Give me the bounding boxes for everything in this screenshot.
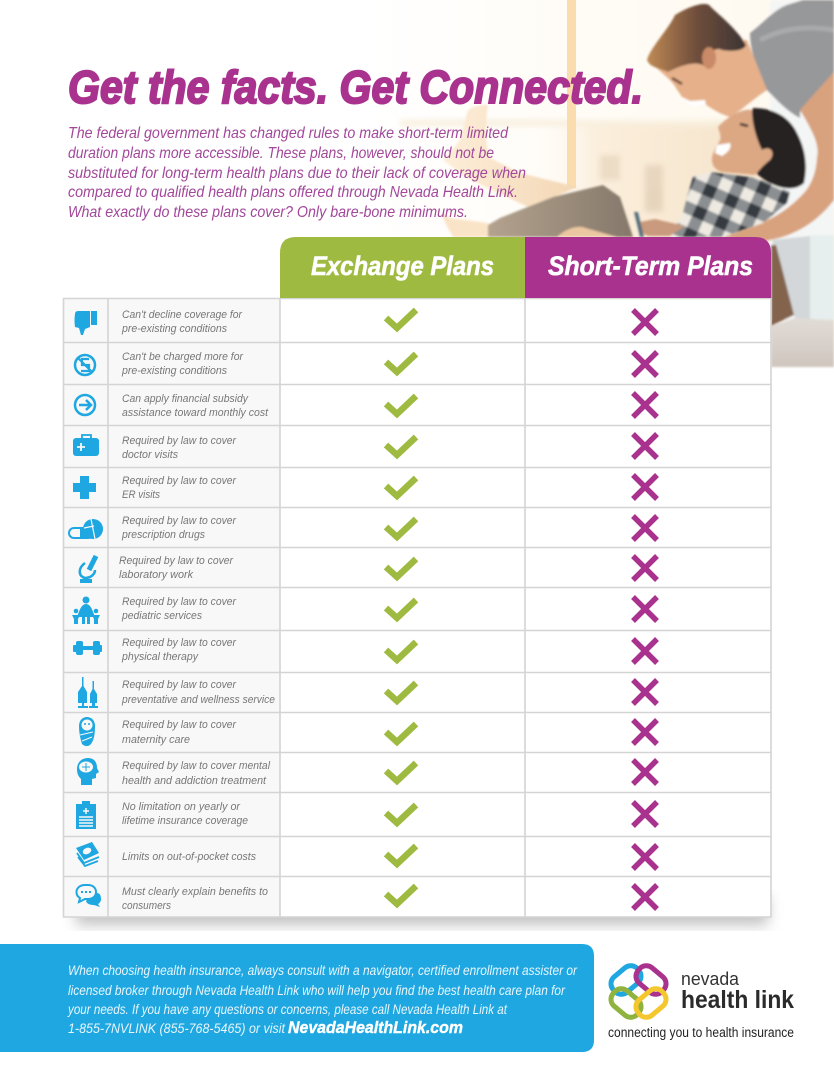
intro paragraph: substituted for long-term health plans due to their lack of coverage when — [68, 165, 526, 182]
row 3 — [75, 393, 657, 419]
row 5 text: ER visits — [122, 489, 160, 501]
header: Exchange Plans: Exchange Plans — [311, 251, 494, 281]
row 7 text: Required by law to cover — [119, 555, 234, 567]
cross — [633, 720, 657, 744]
row 3 text — [122, 393, 269, 419]
row 9 text — [121, 637, 237, 663]
man neck and face — [655, 40, 767, 117]
row 6 text: prescription drugs — [121, 529, 205, 541]
row 5 — [73, 475, 657, 501]
footer banner — [0, 944, 594, 1052]
row 13 text — [122, 801, 248, 827]
row 15 text — [122, 886, 268, 912]
check — [386, 683, 416, 701]
row 8 text: Required by law to cover — [122, 596, 237, 608]
check — [386, 519, 416, 537]
row 11 text — [122, 719, 237, 746]
table background — [64, 299, 771, 917]
logo: Nevada Health Link — [607, 962, 794, 1040]
check — [386, 846, 416, 864]
row 5 text — [122, 475, 237, 501]
check — [386, 354, 416, 372]
label columns — [64, 299, 280, 917]
header: Exchange Plans — [280, 237, 525, 298]
dark leg — [488, 185, 633, 237]
row 4 text: Required by law to cover — [122, 435, 237, 447]
icon: stack of money — [76, 842, 99, 866]
cross — [633, 680, 657, 704]
cross — [633, 597, 657, 621]
row 15 text: consumers — [122, 900, 171, 912]
table shadow — [76, 895, 768, 925]
cross — [633, 516, 657, 540]
row 6 — [69, 515, 657, 541]
photo: laughing couple — [370, 0, 834, 367]
wordmark bold: health link — [681, 986, 794, 1014]
icon: head with brain — [77, 758, 99, 785]
icon: arrow circle — [75, 395, 95, 415]
row 9 text: physical therapy — [121, 651, 199, 663]
table grid — [63, 298, 771, 918]
check — [386, 396, 416, 414]
row 10 text: Required by law to cover — [122, 679, 237, 691]
row 15 — [76, 885, 657, 912]
header: Short-Term Plans — [525, 237, 771, 298]
icon: thumbs down — [74, 311, 97, 335]
icon: microscope — [80, 556, 96, 583]
row 4 text: doctor visits — [122, 449, 178, 461]
row 12 text: health and addiction treatment — [122, 775, 267, 787]
check — [386, 886, 416, 904]
man hair — [647, 4, 746, 72]
row 12 text — [122, 760, 271, 787]
row 14 — [76, 842, 657, 869]
logo mark: linked rings — [607, 962, 670, 1021]
woman plaid shirt — [670, 172, 790, 237]
tagline: connecting you to health insurance — [608, 1025, 794, 1040]
cross — [633, 393, 657, 417]
check — [386, 437, 416, 455]
row 8 text: pediatric services — [121, 610, 202, 622]
intro paragraph: compared to qualified health plans offered through Nevada Health Link. — [68, 184, 518, 201]
icon: medical briefcase — [73, 435, 99, 456]
right window and floor — [770, 0, 834, 320]
row 12 — [77, 758, 657, 787]
row 1 text: Can't decline coverage for — [122, 309, 243, 321]
cross — [633, 845, 657, 869]
cross — [633, 310, 657, 334]
cross — [633, 885, 657, 909]
row 6 text: Required by law to cover — [122, 515, 237, 527]
row 6 text — [121, 515, 237, 541]
cross — [633, 475, 657, 499]
woman face — [712, 110, 772, 175]
intro paragraph: What exactly do these plans cover? Only bare-bone minimums. — [68, 204, 468, 221]
row 10 text — [121, 679, 275, 706]
wordmark: nevada — [681, 969, 740, 989]
row 1 text: pre-existing conditions — [121, 323, 227, 335]
cross — [633, 760, 657, 784]
check — [386, 559, 416, 577]
raised leg — [443, 105, 577, 208]
row 13 text: No limitation on yearly or — [122, 801, 241, 813]
man arm — [723, 72, 834, 241]
row 11 text: maternity care — [122, 734, 190, 746]
man shirt — [750, 0, 834, 118]
intro paragraph — [68, 125, 526, 221]
row 11 — [79, 717, 657, 746]
row 2 text: Can't be charged more for — [122, 351, 244, 363]
row 13 text: lifetime insurance coverage — [122, 815, 248, 827]
row 4 — [73, 434, 657, 461]
row 3 text: assistance toward monthly cost — [122, 407, 269, 419]
row 8 — [72, 596, 657, 624]
row 9 text: Required by law to cover — [122, 637, 237, 649]
cross — [633, 802, 657, 826]
row 13 — [76, 801, 657, 829]
title: Get the facts. Get Connected. — [68, 61, 643, 113]
icon: clipboard — [76, 801, 96, 829]
woman hair — [745, 108, 806, 188]
check — [386, 642, 416, 660]
cross — [633, 352, 657, 376]
row 8 text — [121, 596, 237, 622]
row 1 — [74, 309, 657, 335]
row 5 text: Required by law to cover — [122, 475, 237, 487]
check — [386, 724, 416, 742]
icon: medical cross — [73, 476, 96, 499]
check — [386, 600, 416, 618]
header: Short-Term Plans: Short-Term Plans — [548, 251, 753, 281]
row 11 text: Required by law to cover — [122, 719, 237, 731]
cross — [633, 434, 657, 458]
icon: dumbbell — [73, 641, 102, 655]
row 7 text: laboratory work — [119, 569, 193, 581]
check — [386, 805, 416, 823]
row 14 text: Limits on out-of-pocket costs — [122, 851, 256, 863]
footer text: 1-855-7NVLINK (855-768-5465) or visit — [68, 1020, 286, 1036]
cross — [633, 639, 657, 663]
row 15 text: Must clearly explain benefits to — [122, 886, 268, 898]
row 4 text — [122, 435, 237, 461]
row 2 text — [121, 351, 244, 377]
comparison table — [63, 237, 771, 918]
intro paragraph: duration plans more accessible. These plans, however, should not be — [68, 145, 494, 162]
row 3 text: Can apply financial subsidy — [122, 393, 249, 405]
check — [386, 763, 416, 781]
lower foot — [442, 213, 488, 237]
footer text: When choosing health insurance, always consult with a navigator, certified enrollment assister or — [68, 962, 578, 978]
intro paragraph: The federal government has changed rules to make short-term limited — [68, 125, 509, 142]
row 9 — [73, 637, 657, 663]
row 1 text — [121, 309, 243, 335]
icon: no dollar sign — [75, 355, 95, 375]
footer text: your needs. If you have any questions or concerns, please call Nevada Health Link at — [67, 1001, 508, 1017]
icon: family — [72, 596, 100, 624]
row 10 text: preventative and wellness service — [121, 694, 275, 706]
row 2 — [75, 351, 657, 377]
woman hand — [640, 219, 685, 236]
row 10 — [78, 677, 657, 708]
footer text: NevadaHealthLink.com — [288, 1018, 463, 1037]
icon: speech bubbles — [76, 885, 101, 907]
check — [386, 478, 416, 496]
icon: swaddled baby — [79, 717, 95, 746]
check — [386, 310, 416, 328]
cross — [633, 556, 657, 580]
footer text — [67, 962, 578, 1037]
icon: pills — [69, 519, 103, 539]
footer text: licensed broker through Nevada Health Link who will help you find the best health care plan for — [68, 982, 566, 998]
row 12 text: Required by law to cover mental — [122, 760, 271, 772]
row 7 — [80, 555, 657, 583]
row 7 text — [119, 555, 234, 581]
icon: syringes — [78, 677, 98, 708]
row 2 text: pre-existing conditions — [121, 365, 227, 377]
